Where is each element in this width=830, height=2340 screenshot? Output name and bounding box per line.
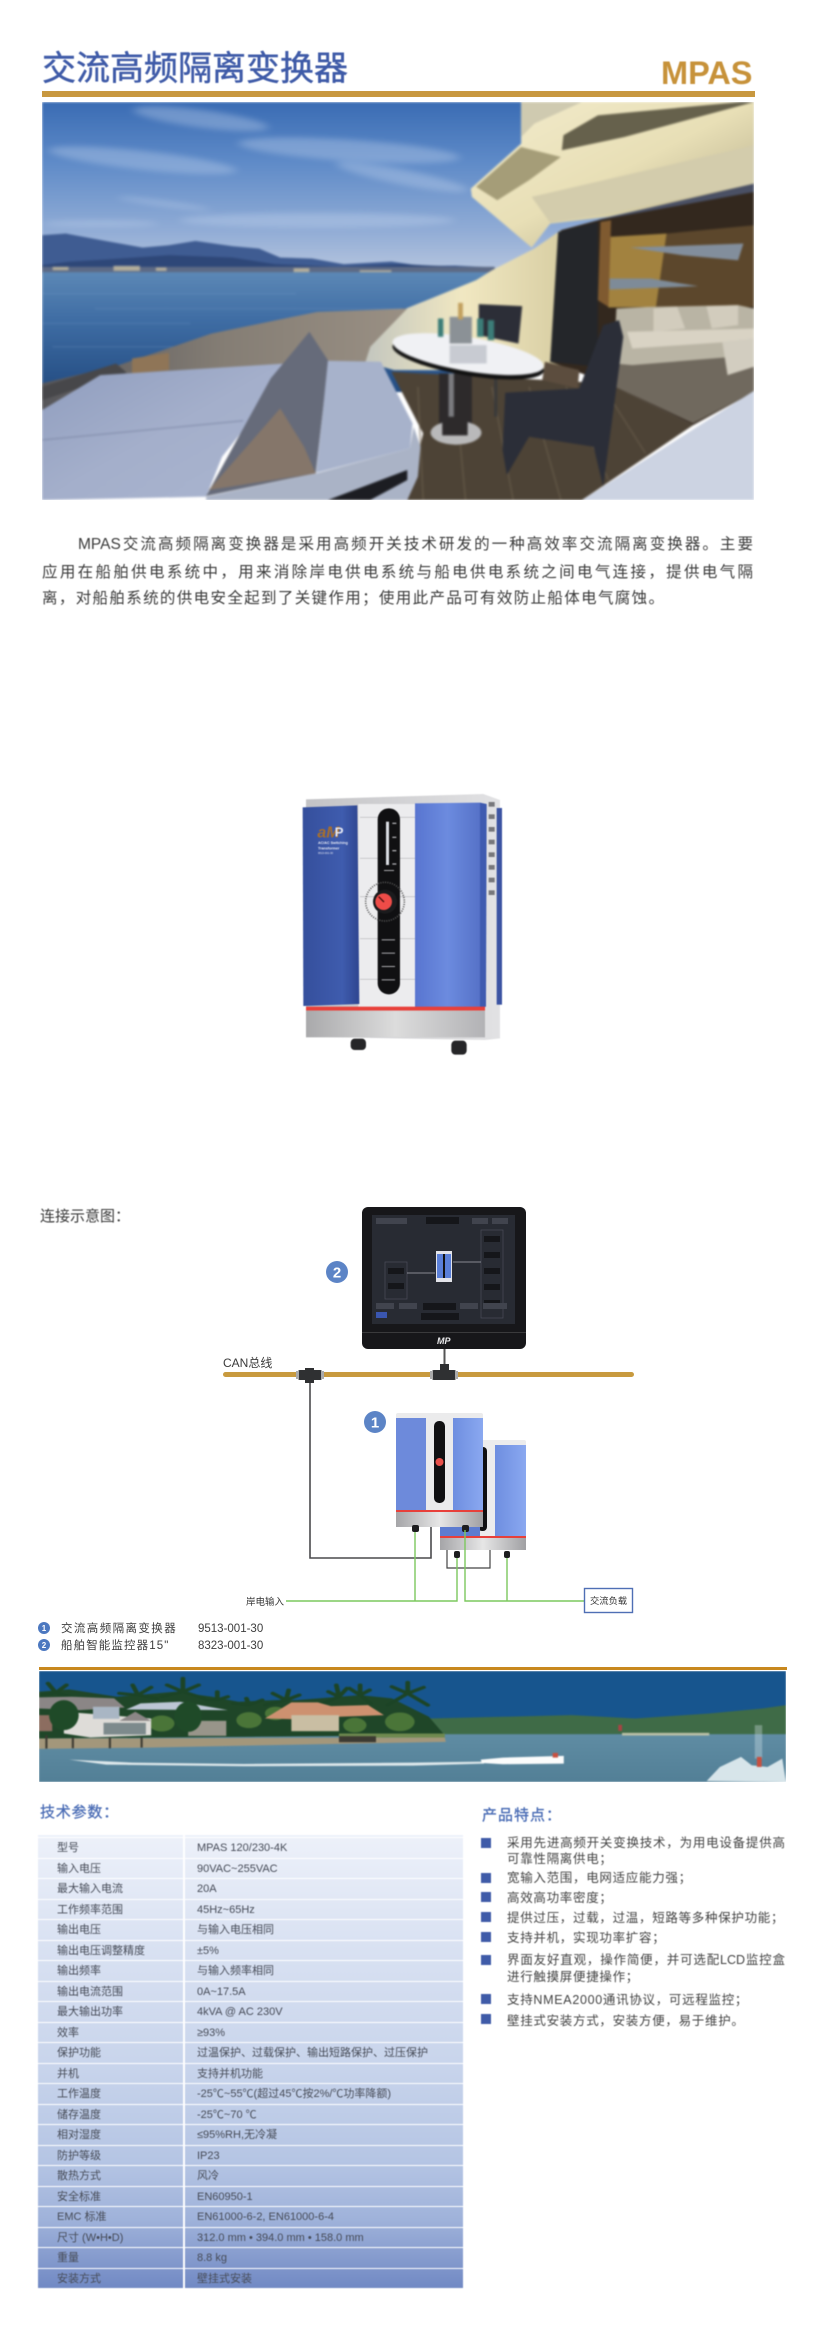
features list: 支持NMEA2000通讯协议，可远程监控； — [507, 1993, 748, 2007]
sofa — [614, 305, 754, 365]
photo: waterfront — [39, 1671, 786, 1782]
cooling vents — [489, 802, 495, 895]
title: 交流高频隔离变换器 — [42, 50, 348, 88]
specifications table: 输出电压 — [57, 1924, 101, 1936]
shore input label: 岸电输入 — [246, 1596, 285, 1608]
specifications table: 20A — [197, 1883, 217, 1895]
badge 2: 2 — [333, 1264, 341, 1282]
T connector left — [296, 1368, 324, 1383]
T connector right — [430, 1364, 458, 1380]
legend item 2 — [38, 1638, 263, 1652]
specifications table: 输入电压 — [57, 1862, 101, 1874]
legend item 2: 2 — [42, 1641, 47, 1650]
specifications table: 工作频率范围 — [57, 1904, 123, 1916]
right cushion — [316, 361, 413, 473]
photo rule — [39, 1667, 787, 1670]
specifications table — [38, 1835, 463, 2288]
specifications table: 防护等级 — [57, 2150, 101, 2162]
channel marker — [618, 1725, 622, 1731]
intro paragraph: MPAS交流高频隔离变换器是采用高频开关技术研发的一种高效率交流隔离变换器。主要 — [78, 536, 753, 553]
chair — [503, 320, 623, 487]
black bus cable — [310, 1380, 431, 1558]
specifications table: 保护功能 — [57, 2047, 101, 2059]
features list: 壁挂式安装方式，安装方便，易于维护。 — [507, 2014, 745, 2028]
cabinet body — [306, 794, 500, 1040]
badge 2 — [326, 1261, 348, 1283]
features list: 宽输入范围，电网适应能力强； — [507, 1871, 692, 1885]
teak deck — [391, 372, 693, 500]
features list: 高效高功率密度； — [507, 1891, 613, 1905]
mountains — [42, 234, 495, 273]
specifications table: 储存温度 — [57, 2109, 101, 2121]
legend item 2: 8323-001-30 — [198, 1640, 263, 1652]
front converter unit — [396, 1413, 483, 1532]
wake — [69, 1756, 564, 1766]
town — [42, 267, 495, 273]
specifications table: ≥93% — [197, 2027, 225, 2039]
clouds — [42, 101, 471, 228]
spray — [707, 1725, 786, 1782]
AC load box — [584, 1588, 632, 1612]
sky — [42, 102, 754, 275]
terracotta house — [265, 1702, 384, 1720]
upper deck overhang — [471, 102, 754, 248]
specifications table: 重量 — [57, 2252, 79, 2264]
specifications table: 散热方式 — [57, 2170, 101, 2182]
specifications table: 壁挂式安装 — [197, 2272, 252, 2284]
red trim — [306, 1007, 485, 1011]
specifications table: 并机 — [57, 2068, 79, 2080]
table base — [439, 373, 472, 437]
badge 1: 1 — [371, 1414, 379, 1432]
specifications table: 最大输出功率 — [57, 2006, 123, 2018]
cabin interior — [550, 192, 754, 425]
specifications table: 312.0 mm • 394.0 mm • 158.0 mm — [197, 2232, 364, 2244]
legend item 1 — [38, 1621, 263, 1635]
specifications table: 0A~17.5A — [197, 1986, 246, 1998]
champagne bucket and glasses — [450, 317, 472, 343]
far tree line — [429, 1705, 786, 1738]
specifications table: 工作温度 — [57, 2088, 101, 2100]
specifications table: ±5% — [197, 1944, 219, 1956]
specifications table: 与输入电压相同 — [197, 1924, 274, 1936]
right door — [415, 803, 480, 1008]
specifications table: 相对湿度 — [57, 2129, 101, 2141]
brand mark: P — [335, 825, 344, 840]
specifications table: -25℃~55℃(超过45℃按2%/℃功率降额) — [197, 2088, 391, 2100]
specifications table: 90VAC~255VAC — [197, 1862, 278, 1874]
table top — [386, 329, 551, 388]
water — [39, 1734, 786, 1782]
specifications table: 风冷 — [197, 2170, 219, 2182]
specifications table: 输出电流范围 — [57, 1986, 123, 1998]
features list: 可靠性隔离供电； — [507, 1852, 613, 1866]
features list: 支持并机，实现功率扩容； — [507, 1931, 665, 1945]
palm crowns — [40, 1678, 428, 1705]
specifications table: 尺寸 (W•H•D) — [57, 2232, 123, 2244]
specifications table: 8.8 kg — [197, 2252, 227, 2264]
cable glands — [351, 1039, 467, 1055]
title rule — [42, 91, 755, 97]
features list — [480, 1836, 785, 2028]
specifications table: ≤95%RH,无冷凝 — [197, 2129, 277, 2141]
palm in front — [49, 1700, 202, 1732]
legend item 1: 9513-001-30 — [198, 1623, 263, 1635]
near trees — [39, 1689, 445, 1739]
features list: 采用先进高频开关变换技术，为用电设备提供高 — [507, 1836, 785, 1850]
white house — [64, 1712, 151, 1738]
right foreground hull — [582, 391, 754, 500]
centre panel — [358, 804, 416, 1008]
specifications table: 输出频率 — [57, 1965, 101, 1977]
main cushion — [42, 363, 286, 500]
monitor cable — [444, 1349, 446, 1369]
chair behind table — [479, 304, 522, 343]
specifications table: 安全标准 — [57, 2191, 101, 2203]
monitor — [362, 1207, 526, 1349]
jet ski rider — [553, 1753, 558, 1758]
bench back — [42, 308, 407, 410]
specifications table: 输出电压调整精度 — [57, 1944, 145, 1956]
CAN bus line — [223, 1372, 634, 1377]
brand mark: AC/AC Switching — [318, 841, 348, 845]
photo: yacht deck — [42, 102, 754, 500]
features list: 提供过压，过载，过温，短路等多种保护功能； — [507, 1911, 784, 1925]
brand mark: Transformer — [318, 846, 340, 850]
connection diagram — [38, 1207, 634, 1652]
intro paragraph: 应用在船舶供电系统中，用来消除岸电供电系统与船电供电系统之间电气连接，提供电气隔 — [42, 564, 753, 581]
specifications table: EMC 标准 — [57, 2211, 106, 2223]
backrest — [206, 332, 329, 496]
specifications table: 效率 — [57, 2027, 79, 2039]
legend item 1: 1 — [42, 1624, 47, 1633]
product photo: converter unit — [302, 794, 503, 1056]
control dial — [366, 882, 404, 921]
intro paragraph: 离，对船舶系统的供电安全起到了关键作用；使用此产品可有效防止船体电气腐蚀。 — [42, 590, 664, 607]
specifications table: 最大输入电流 — [57, 1883, 123, 1895]
specifications table: EN60950-1 — [197, 2191, 253, 2203]
specifications table: MPAS 120/230-4K — [197, 1842, 287, 1854]
green power lines — [286, 1530, 584, 1601]
badge 1 — [364, 1411, 386, 1433]
AC load box: 交流负载 — [590, 1595, 627, 1606]
specifications table: EN61000-6-2, EN61000-6-4 — [197, 2211, 334, 2223]
features list: 界面友好直观，操作简便，并可选配LCD监控盒 — [507, 1953, 785, 1967]
hull lip — [206, 427, 420, 500]
model name: MPAS — [661, 55, 752, 91]
dock wall — [39, 1738, 446, 1749]
monitor: MP — [437, 1336, 451, 1346]
specifications table: 型号 — [57, 1842, 79, 1854]
specifications table: -25℃~70 ℃ — [197, 2109, 257, 2121]
intro paragraph — [42, 535, 753, 607]
second house — [126, 1702, 228, 1710]
features list: 进行触摸屏便捷操作； — [507, 1970, 639, 1984]
specifications table: 与输入频率相同 — [197, 1965, 274, 1977]
legend item 2: 船舶智能监控器15" — [61, 1638, 169, 1652]
specifications table: 45Hz~65Hz — [197, 1904, 255, 1916]
display slot — [378, 808, 400, 994]
left door — [303, 805, 359, 1006]
diagram heading: 连接示意图： — [40, 1208, 130, 1225]
specifications table: 安装方式 — [57, 2272, 101, 2284]
side wall — [365, 230, 561, 370]
heading: specifications: 技术参数： — [40, 1804, 119, 1821]
heading: features: 产品特点： — [482, 1807, 562, 1824]
base — [306, 1011, 485, 1037]
CAN label: CAN总线 — [223, 1356, 272, 1370]
specifications table: 支持并机功能 — [197, 2068, 263, 2080]
specifications table: IP23 — [197, 2150, 220, 2162]
legend item 1: 交流高频隔离变换器 — [61, 1621, 177, 1635]
brand mark — [317, 824, 348, 855]
brand mark: aM — [317, 824, 340, 841]
brand mark: 9513-001-30 — [318, 851, 334, 855]
side strip — [497, 808, 502, 1005]
sliding door frame — [598, 184, 754, 220]
specifications table: 过温保护、过载保护、输出短路保护、过压保护 — [197, 2047, 428, 2059]
storm sky — [39, 1671, 786, 1738]
rear converter unit — [440, 1440, 526, 1558]
cable between units — [447, 1550, 490, 1568]
specifications table: 4kVA @ AC 230V — [197, 2006, 283, 2018]
sea — [42, 272, 497, 392]
